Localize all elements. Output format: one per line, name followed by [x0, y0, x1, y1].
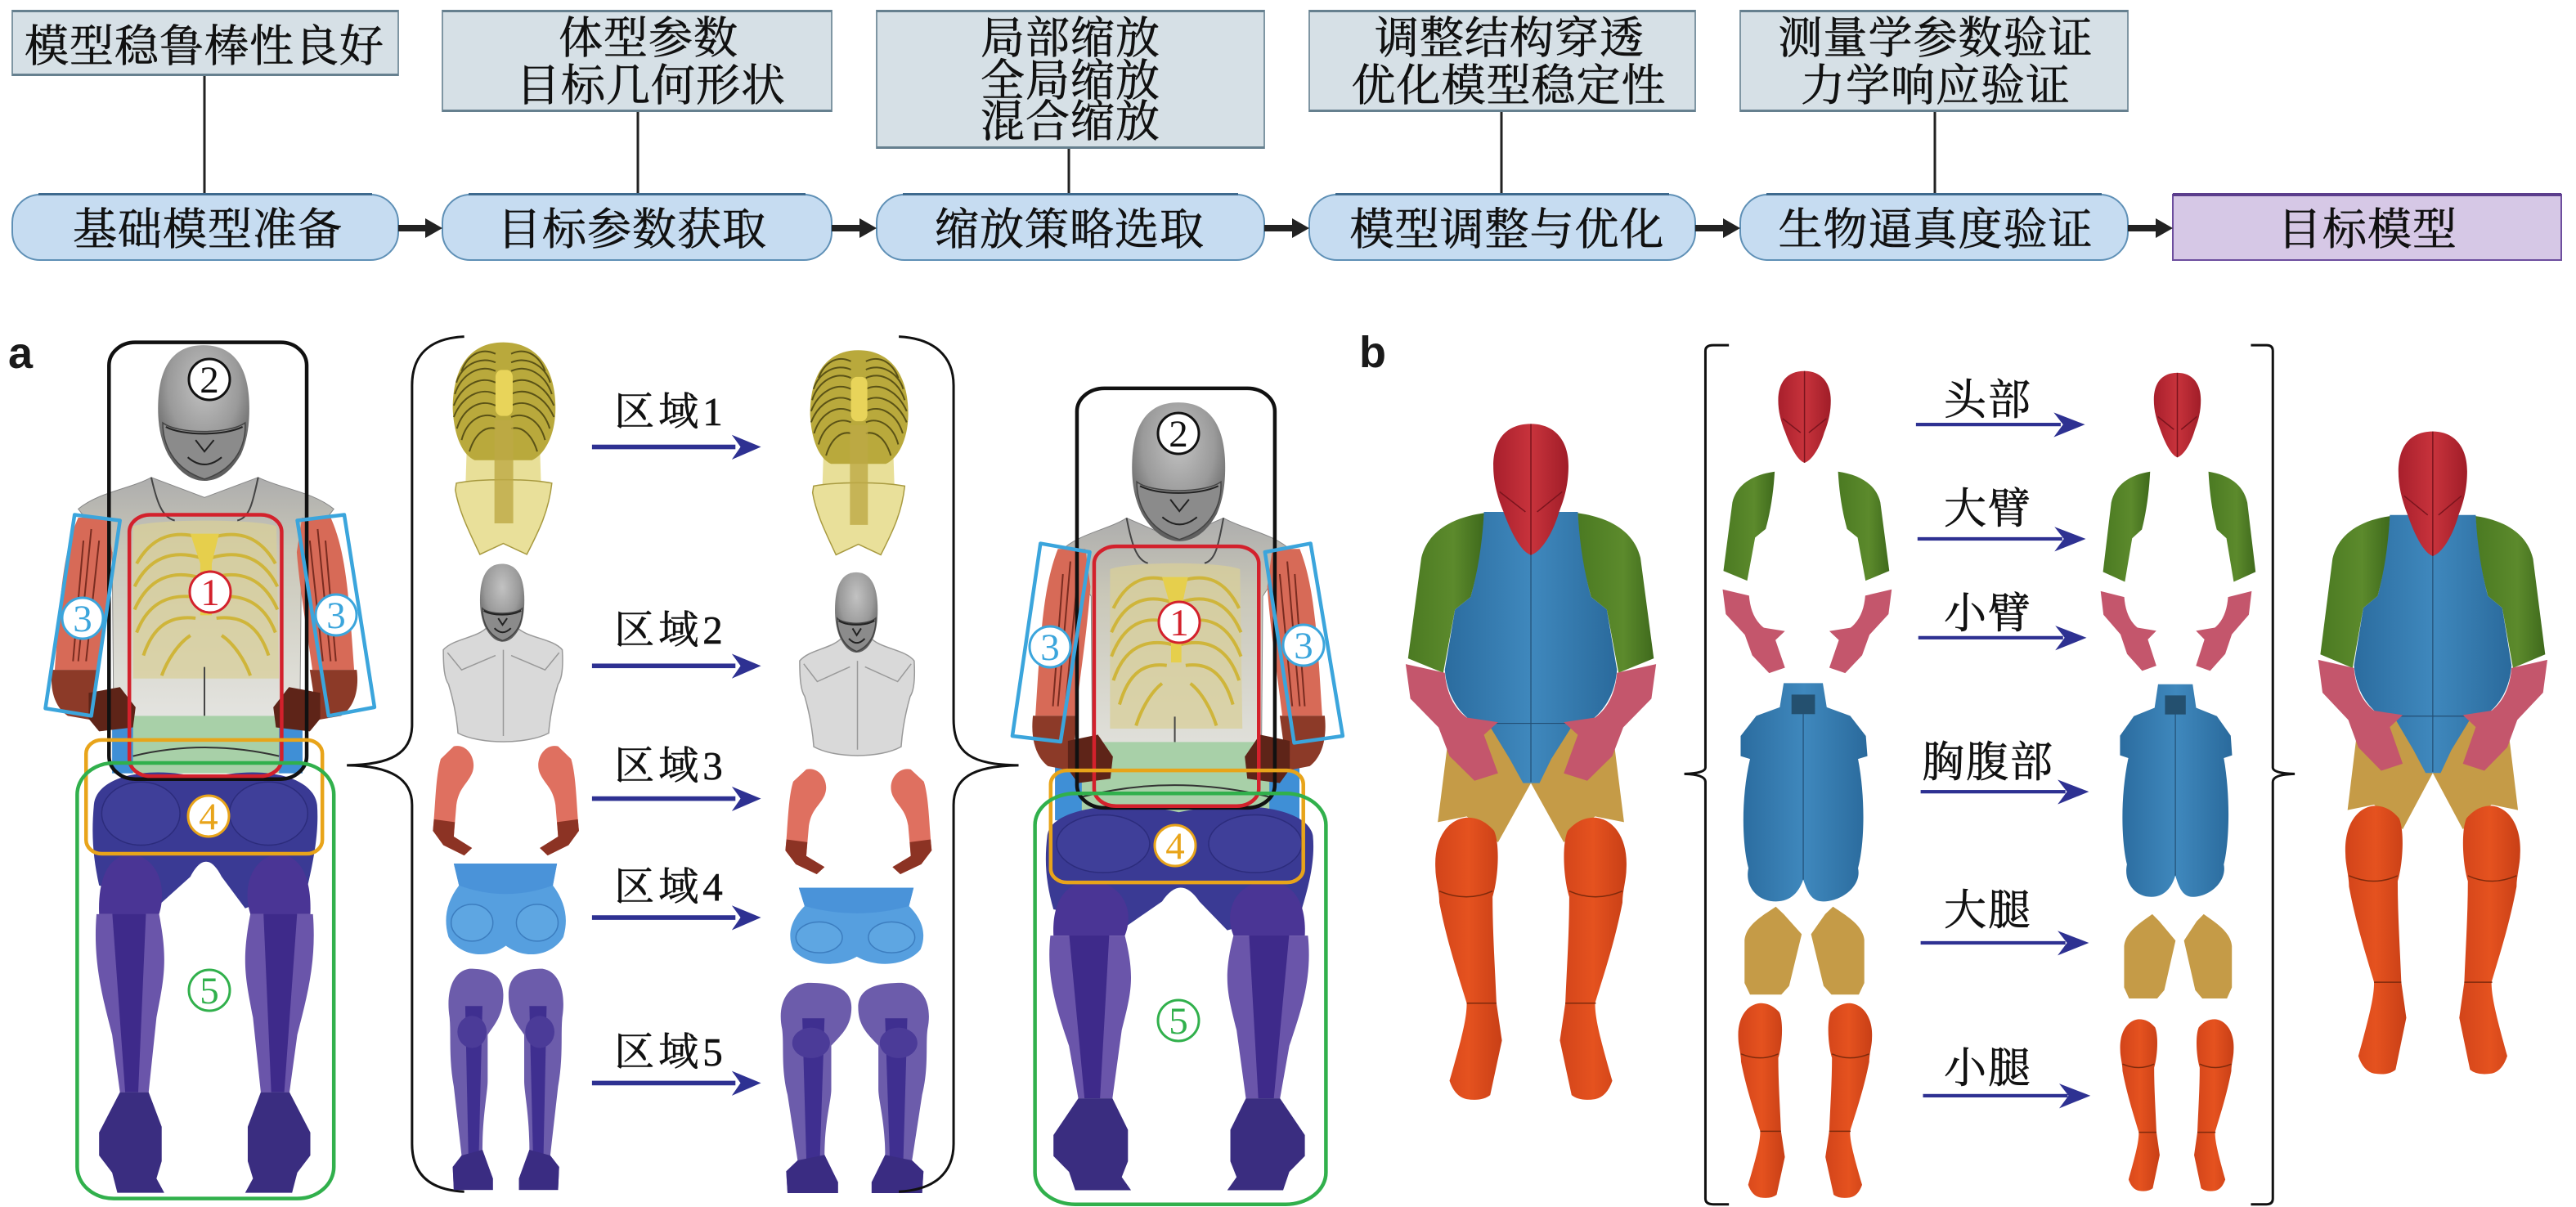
connector lines: [204, 76, 1935, 194]
step pill 1: 基础模型准备: [73, 205, 343, 254]
panel label a: a: [8, 329, 34, 378]
note box 5: 力学响应验证: [1801, 61, 2071, 110]
region numbers: 4: [1165, 825, 1185, 868]
scaled body figure: [2318, 432, 2547, 1074]
note box 2: [442, 10, 832, 112]
region numbers: [1030, 413, 1324, 1043]
panel a: region labels: 区域5: [614, 1030, 727, 1075]
target model box: [2173, 193, 2561, 260]
body parts after scaling: [2101, 373, 2255, 1191]
region numbers: [62, 359, 357, 1012]
region numbers: 2: [200, 359, 219, 402]
panel b: body part labels: [1922, 378, 2054, 1093]
region numbers: 2: [1169, 413, 1188, 455]
region numbers: 1: [200, 572, 220, 614]
flowchart: process steps: [12, 10, 2561, 260]
panel a: region labels: 区域1: [614, 389, 727, 434]
panel a: right brace: [899, 337, 1019, 1191]
note box 3: 混合缩放: [981, 97, 1160, 146]
region numbers: 4: [199, 796, 218, 838]
note box 3: 全局缩放: [981, 56, 1160, 105]
body parts before scaling: [1722, 371, 1892, 1198]
note box 4: [1309, 10, 1695, 112]
panel b: body part labels: 大腿: [1944, 888, 2032, 935]
region numbers: 3: [73, 598, 92, 640]
panel a: region parts before scaling: [433, 343, 579, 1190]
note box 1: [12, 10, 398, 76]
panel a: region labels: 区域2: [614, 608, 727, 653]
step pill 5: 生物逼真度验证: [1778, 205, 2094, 254]
region numbers: 3: [326, 595, 346, 637]
target model box: 目标模型: [2278, 205, 2457, 254]
region numbers: 5: [1169, 1000, 1188, 1043]
step pill 4: 模型调整与优化: [1349, 205, 1665, 254]
note box 4: 优化模型稳定性: [1351, 61, 1667, 110]
panel b: body part labels: 小腿: [1944, 1046, 2032, 1093]
region numbers: 5: [200, 970, 219, 1012]
figure parts: [1032, 402, 1326, 1190]
panel a: scaled figure: [1012, 388, 1343, 1205]
panel a: region labels: [614, 389, 727, 1075]
panel a: original figure: [45, 343, 375, 1199]
step pill 2: 目标参数获取: [497, 205, 767, 254]
note box 2: 体型参数: [559, 14, 738, 63]
note box 4: 调整结构穿透: [1375, 14, 1645, 63]
panel a: region arrows: [592, 435, 761, 1096]
note box 2: 目标几何形状: [516, 61, 786, 110]
region outlines: [1012, 388, 1343, 1205]
note box 5: [1740, 10, 2128, 112]
note box 5: 测量学参数验证: [1778, 14, 2094, 63]
panel a: region labels: 区域3: [614, 743, 727, 788]
region numbers: 3: [1294, 625, 1313, 667]
region outlines: [45, 343, 375, 1199]
left square bracket: [1685, 345, 1729, 1205]
step pill 1: [12, 193, 398, 260]
panel a: left brace: [347, 337, 464, 1191]
panel b: drawing: [1406, 345, 2547, 1205]
panel b: body part labels: 大臂: [1944, 487, 2032, 533]
note box 3: [877, 10, 1264, 149]
step pill 3: [877, 193, 1264, 260]
step pill 5: [1740, 193, 2128, 260]
note box 1: 模型稳鲁棒性良好: [25, 22, 384, 71]
body part arrows: [1916, 412, 2090, 1108]
region numbers: 3: [1040, 626, 1060, 669]
panel b: body part labels: 头部: [1944, 378, 2032, 424]
panel a: region labels: 区域4: [614, 864, 727, 909]
panel b: body part labels: 胸腹部: [1922, 740, 2054, 787]
figure parts: [52, 345, 357, 1193]
step pill 2: [442, 193, 832, 260]
panel a: region parts after scaling: [781, 350, 931, 1193]
right square bracket: [2251, 345, 2295, 1205]
original body figure: [1406, 424, 1656, 1100]
region numbers: 1: [1169, 602, 1189, 644]
step pill 4: [1309, 193, 1695, 260]
step pill 3: 缩放策略选取: [935, 205, 1205, 254]
panel label b: b: [1359, 328, 1386, 377]
note box 3: 局部缩放: [981, 14, 1160, 63]
panel b: body part labels: 小臂: [1944, 591, 2032, 638]
flow arrows: [398, 218, 2173, 238]
